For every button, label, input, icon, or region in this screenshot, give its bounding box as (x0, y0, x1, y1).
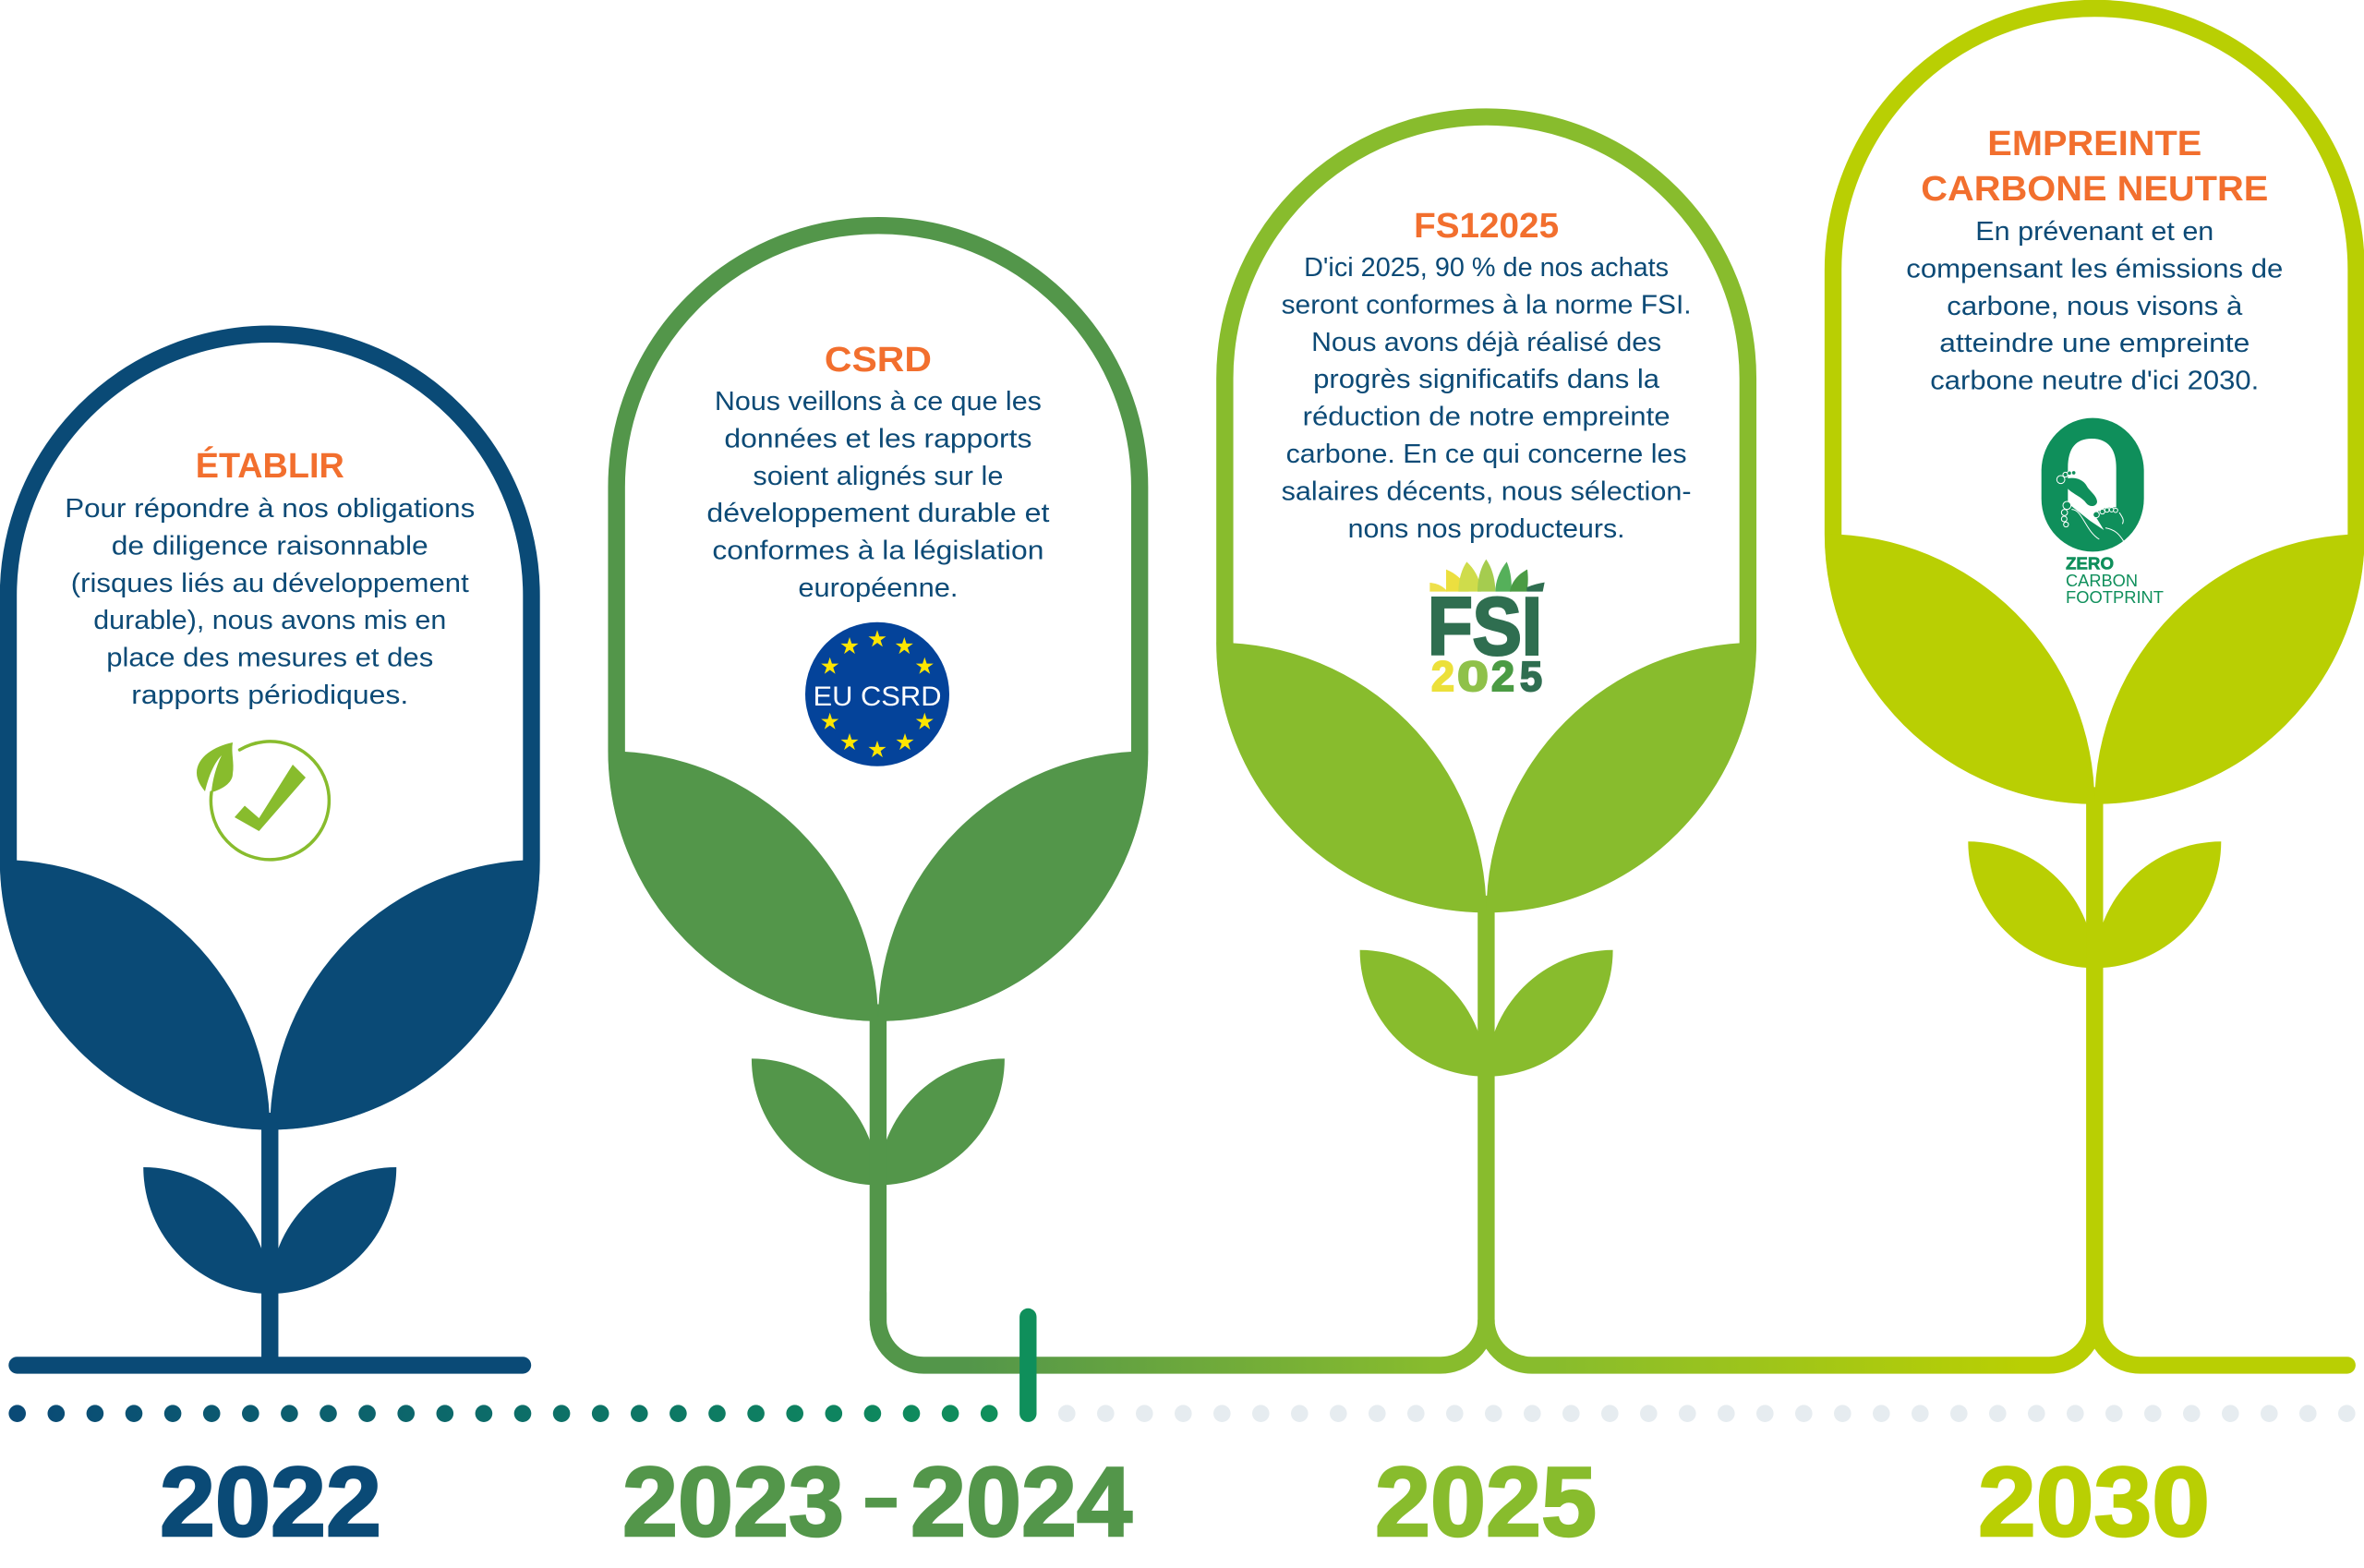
body text: CSRD (706, 387, 1049, 603)
icon: zero carbon footprint logo: CARBON (2066, 571, 2138, 590)
stem 2030 (2086, 802, 2104, 1322)
body text: Empreinte carbone neutre: carbone, nous visons à (1947, 292, 2243, 321)
year label: 2030: 2030 (1978, 1446, 2210, 1557)
icon: FSI 2025 logo: 0 (1457, 653, 1489, 700)
icon: zero carbon footprint logo (2042, 418, 2164, 607)
icon: zero carbon footprint logo: FOOTPRINT (2066, 587, 2164, 607)
icon: FSI 2025 logo (1428, 560, 1545, 700)
year label: 2022: 2022 (160, 1446, 381, 1557)
body text: Établir: place des mesures et des (106, 644, 433, 673)
plant outline 2025 (1224, 117, 1748, 904)
heading: Empreinte carbone neutre: EMPREINTE (1987, 125, 2201, 163)
body text: Empreinte carbone neutre: atteindre une empreinte (1939, 329, 2249, 358)
body text: FS12025 (1282, 253, 1692, 544)
big leaves 2022 (0, 860, 539, 1129)
icon: zero carbon footprint logo: ZERO (2066, 554, 2114, 573)
heading: Empreinte carbone neutre: CARBONE NEUTRE (1921, 170, 2268, 209)
heading: Empreinte carbone neutre (1921, 125, 2268, 209)
big leaves 2030 (1825, 534, 2364, 804)
body text: FS12025: seront conformes à la norme FSI. (1282, 290, 1692, 320)
small leaves 2023-2024 (752, 1058, 1005, 1185)
stem and ground 2022 (17, 1128, 523, 1365)
icon: FSI 2025 logo: 5 (1520, 653, 1542, 700)
icon: FSI 2025 logo: 2 (1431, 653, 1454, 700)
body text: FS12025: salaires décents, nous sélection- (1282, 476, 1692, 506)
big leaves 2023-2024 (609, 751, 1148, 1021)
icon: FSI 2025 logo: 2 (1491, 653, 1514, 700)
plant: 2030 (1825, 8, 2364, 1322)
small leaves 2025 (1360, 950, 1613, 1077)
stem 2023-2024 (870, 1019, 886, 1321)
body text: CSRD: européenne. (798, 573, 958, 603)
icon: EU CSRD badge (805, 622, 949, 766)
timeline: completed dots (8, 1405, 997, 1422)
body text: FS12025: carbone. En ce qui concerne les (1286, 440, 1687, 469)
icon: FSI 2025 logo: FSI (1428, 580, 1542, 672)
big leaves 2025 (1216, 643, 1756, 912)
plant: 2025 (1216, 117, 1756, 1322)
body text: FS12025: réduction de notre empreinte (1303, 403, 1670, 432)
plant outline 2030 (1833, 8, 2357, 796)
body text: Empreinte carbone neutre: En prévenant et en (1975, 217, 2213, 247)
heading: CSRD: CSRD (825, 341, 932, 380)
body text: Établir: rapports périodiques. (131, 681, 408, 710)
body text: Établir (65, 494, 475, 710)
timeline: today marker (1019, 1317, 1037, 1414)
body text: Établir: (risques liés au développement (71, 569, 469, 598)
body text: CSRD: conformes à la législation (712, 537, 1043, 566)
text block: Établir (65, 445, 475, 710)
text block: FS12025 (1282, 207, 1692, 544)
icon: EU CSRD badge: EU CSRD (813, 681, 942, 712)
body text: Empreinte carbone neutre (1906, 217, 2283, 396)
body text: FS12025: nons nos producteurs. (1348, 514, 1625, 544)
body text: CSRD: données et les rapports (724, 424, 1031, 453)
sun petals (1429, 560, 1545, 592)
small leaves 2030 (1968, 841, 2221, 968)
plant outline 2023-2024 (617, 225, 1140, 1013)
plant outline 2022 (8, 334, 532, 1121)
body text: FS12025: D'ici 2025, 90 % de nos achats (1304, 253, 1669, 283)
text block: Empreinte carbone neutre (1906, 125, 2283, 396)
body text: FS12025: progrès significatifs dans la (1313, 365, 1660, 394)
connector: ground line from 2023 through 2030 (878, 1293, 2347, 1365)
body text: Établir: Pour répondre à nos obligations (65, 494, 475, 524)
plant: 2023-2024 (609, 225, 1148, 1321)
year label: 2023-2024: – (863, 1440, 899, 1550)
year label: 2023-2024: 2023 (622, 1446, 844, 1557)
small leaves 2022 (143, 1167, 396, 1294)
body text: CSRD: Nous veillons à ce que les (715, 387, 1042, 416)
year label: 2023-2024 (622, 1440, 1132, 1557)
body text: Empreinte carbone neutre: carbone neutre d'ici 2030. (1930, 367, 2259, 396)
heading: Établir: ÉTABLIR (196, 445, 344, 486)
text block: CSRD (706, 341, 1049, 603)
icon: leaf and check mark (197, 742, 329, 860)
body text: Établir: de diligence raisonnable (112, 531, 428, 561)
year label: 2025: 2025 (1375, 1446, 1597, 1557)
body text: Établir: durable), nous avons mis en (93, 606, 446, 635)
plant: 2022 (0, 334, 539, 1365)
stem 2025 (1478, 910, 1495, 1322)
timeline: upcoming dots (1058, 1405, 2356, 1422)
body text: Empreinte carbone neutre: compensant les émissions de (1906, 254, 2283, 283)
heading: FS12025: FS12025 (1414, 207, 1559, 246)
year label: 2023-2024: 2024 (911, 1446, 1132, 1557)
body text: CSRD: développement durable et (706, 499, 1049, 528)
body text: FS12025: Nous avons déjà réalisé des (1311, 328, 1661, 357)
body text: CSRD: soient alignés sur le (753, 462, 1003, 491)
